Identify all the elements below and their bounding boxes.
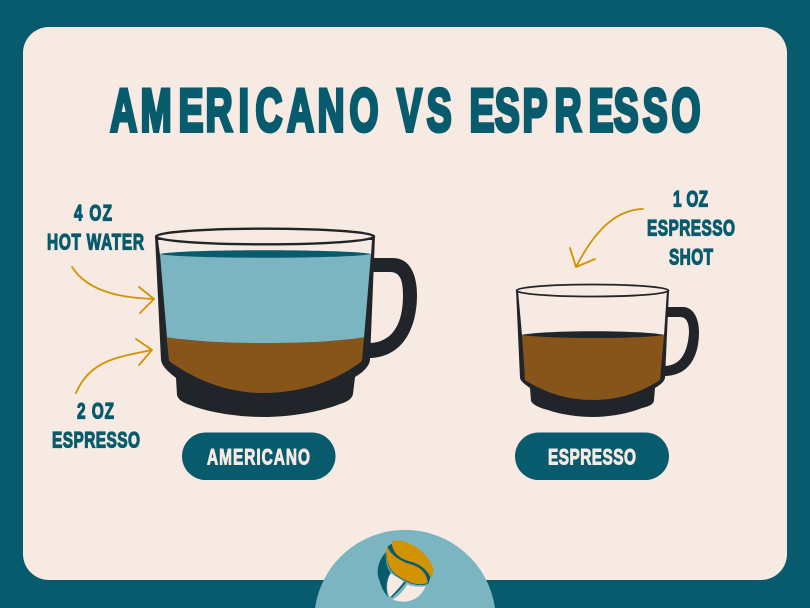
arrow: espresso shot <box>570 209 643 267</box>
logo badge <box>315 530 495 608</box>
label: 4 oz hot water: HOT WATER <box>47 231 144 255</box>
cup handle <box>368 258 417 358</box>
label: 2 oz espresso: ESPRESSO <box>52 429 140 453</box>
cup rim <box>156 229 374 244</box>
label: 1 oz espresso shot: ESPRESSO <box>647 217 735 241</box>
cup body and base <box>516 290 669 417</box>
espresso <box>522 335 664 400</box>
pill: americano: AMERICANO <box>207 446 310 470</box>
espresso layer <box>166 337 364 393</box>
arrow: hot water <box>72 267 154 313</box>
label: 2 oz espresso: 2 OZ <box>77 400 114 424</box>
label: 2 oz espresso <box>52 400 140 453</box>
cup interior <box>518 290 667 335</box>
coffee surface <box>521 331 665 340</box>
label: 4 oz hot water <box>47 202 144 255</box>
americano cup <box>155 229 417 417</box>
water <box>160 254 371 347</box>
icon: coffee bean logo <box>378 541 433 602</box>
arrow: espresso <box>76 339 152 393</box>
pill: espresso <box>515 432 669 480</box>
label: 1 oz espresso shot: 1 OZ <box>673 188 708 212</box>
espresso cup <box>516 284 699 417</box>
cup body and base <box>155 236 375 417</box>
cup handle <box>664 307 699 376</box>
pill: americano <box>182 432 336 480</box>
label: 1 oz espresso shot <box>647 188 735 270</box>
label: 4 oz hot water: 4 OZ <box>74 202 112 226</box>
water surface <box>160 250 371 258</box>
pill: espresso: ESPRESSO <box>548 446 636 470</box>
title: AMERICANO VS ESPRESSO <box>110 77 700 144</box>
cup interior <box>158 240 372 255</box>
cup rim <box>516 284 668 296</box>
label: 1 oz espresso shot: SHOT <box>669 246 713 270</box>
